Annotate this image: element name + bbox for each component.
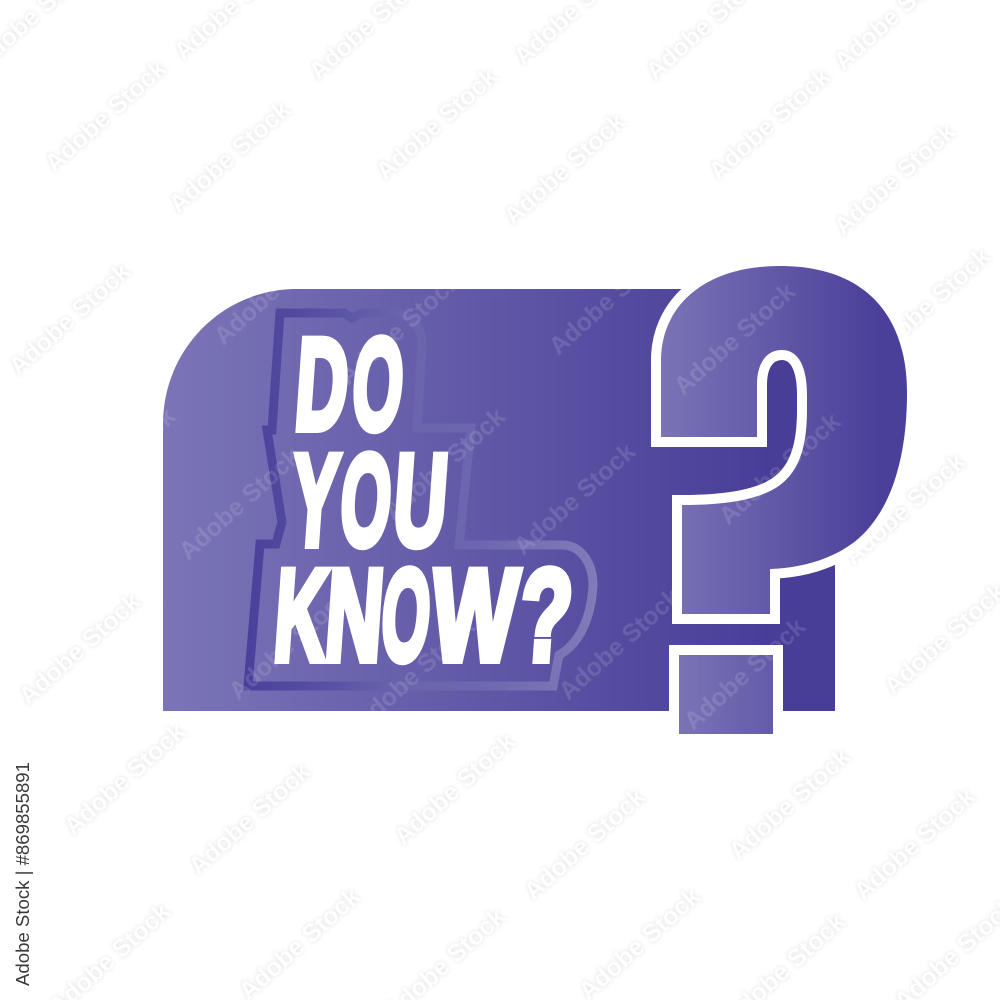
heading: do you know: O <box>348 311 408 457</box>
heading: do you know: O <box>336 427 396 573</box>
watermark on background: Adobe Stock <box>839 447 971 571</box>
watermark over banner: Adobe Stock <box>49 402 181 526</box>
watermark on background: Adobe Stock <box>829 117 961 241</box>
watermark over banner: Adobe Stock <box>224 582 356 706</box>
icon: large question mark <box>661 266 907 740</box>
watermark on background: Adobe Stock <box>519 782 651 906</box>
watermark on background: Adobe Stock <box>864 242 996 366</box>
watermark on background: Adobe Stock <box>164 95 296 219</box>
watermark over banner: Adobe Stock <box>334 267 466 391</box>
heading: do you know: U <box>389 427 452 573</box>
watermark on background: Adobe Stock <box>499 107 631 231</box>
heading: do you know: O <box>377 542 435 688</box>
watermark over banner <box>49 227 846 736</box>
watermark over banner: Adobe Stock <box>544 237 676 361</box>
watermark on background: Adobe Stock <box>371 62 503 186</box>
heading: do you know: W <box>427 542 522 688</box>
watermark on background: Adobe Stock <box>4 257 136 381</box>
heading: do you know <box>270 311 577 688</box>
watermark over banner: Adobe Stock <box>174 442 306 566</box>
watermark over banner: Adobe Stock <box>679 612 811 736</box>
watermark on background: Adobe Stock <box>724 742 856 866</box>
watermark over banner: Adobe Stock <box>349 612 481 736</box>
heading: do you know: K <box>270 542 332 688</box>
watermark over banner: Adobe Stock <box>554 582 686 706</box>
watermark on background: Adobe Stock <box>849 782 981 906</box>
heading: do you know: Y <box>287 427 343 573</box>
watermark on background: Adobe Stock <box>184 757 316 881</box>
heading: do you know: N <box>321 542 388 688</box>
watermark on background: Adobe Stock <box>704 62 836 186</box>
watermark on background: Adobe Stock <box>59 717 191 841</box>
watermark over banner: Adobe Stock <box>509 437 641 561</box>
watermark over banner: Adobe Stock <box>209 227 341 351</box>
watermark on background: Adobe Stock <box>389 727 521 851</box>
heading: do you know: ? <box>515 542 577 688</box>
heading: do you know: D <box>291 311 353 457</box>
text outline badge <box>248 313 593 686</box>
stock id caption: Adobe Stock | #869855891 <box>12 762 33 986</box>
watermark on background: Adobe Stock <box>14 587 146 711</box>
watermark over banner: Adobe Stock <box>379 402 511 526</box>
watermark on background: Adobe Stock <box>40 54 172 178</box>
watermark over banner: Adobe Stock <box>669 277 801 401</box>
panel: purple banner <box>163 289 835 711</box>
watermark over banner: Adobe Stock <box>714 407 846 531</box>
